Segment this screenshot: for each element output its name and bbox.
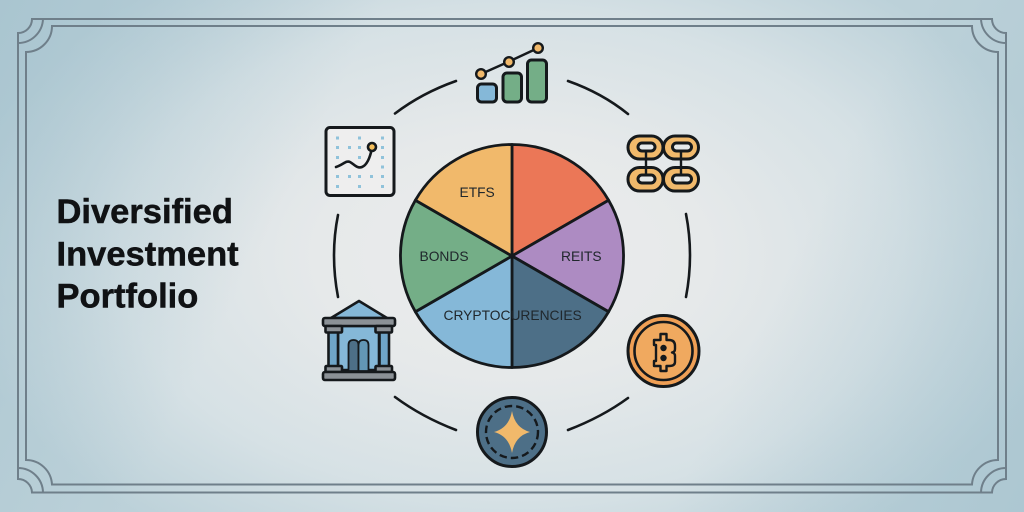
title: Investment [56, 236, 239, 274]
pie chart [400, 144, 624, 368]
pie labels: REITS [561, 249, 602, 264]
slice: navy [512, 256, 609, 368]
slice: cryptocurrencies [415, 256, 512, 368]
title: Portfolio [56, 278, 198, 316]
slice: bonds [400, 200, 512, 312]
pie labels: CRYPTOCURENCIES [444, 308, 582, 323]
slice: ETFs [415, 144, 512, 256]
slice: coral [512, 144, 609, 256]
pie labels: ETFS [460, 185, 495, 200]
slice: REITs [512, 200, 624, 312]
pie labels [420, 185, 602, 323]
title [56, 193, 239, 316]
icon: chart tile [326, 128, 394, 196]
icon: bank building [323, 301, 395, 380]
title: Diversified [56, 193, 233, 231]
icon: chain links [628, 136, 698, 191]
connecting ring arcs [334, 81, 690, 430]
icon: bitcoin coin [628, 316, 699, 386]
pie labels: BONDS [420, 249, 469, 264]
icon: star coin [478, 398, 546, 466]
icon: growth bar chart [476, 43, 546, 102]
